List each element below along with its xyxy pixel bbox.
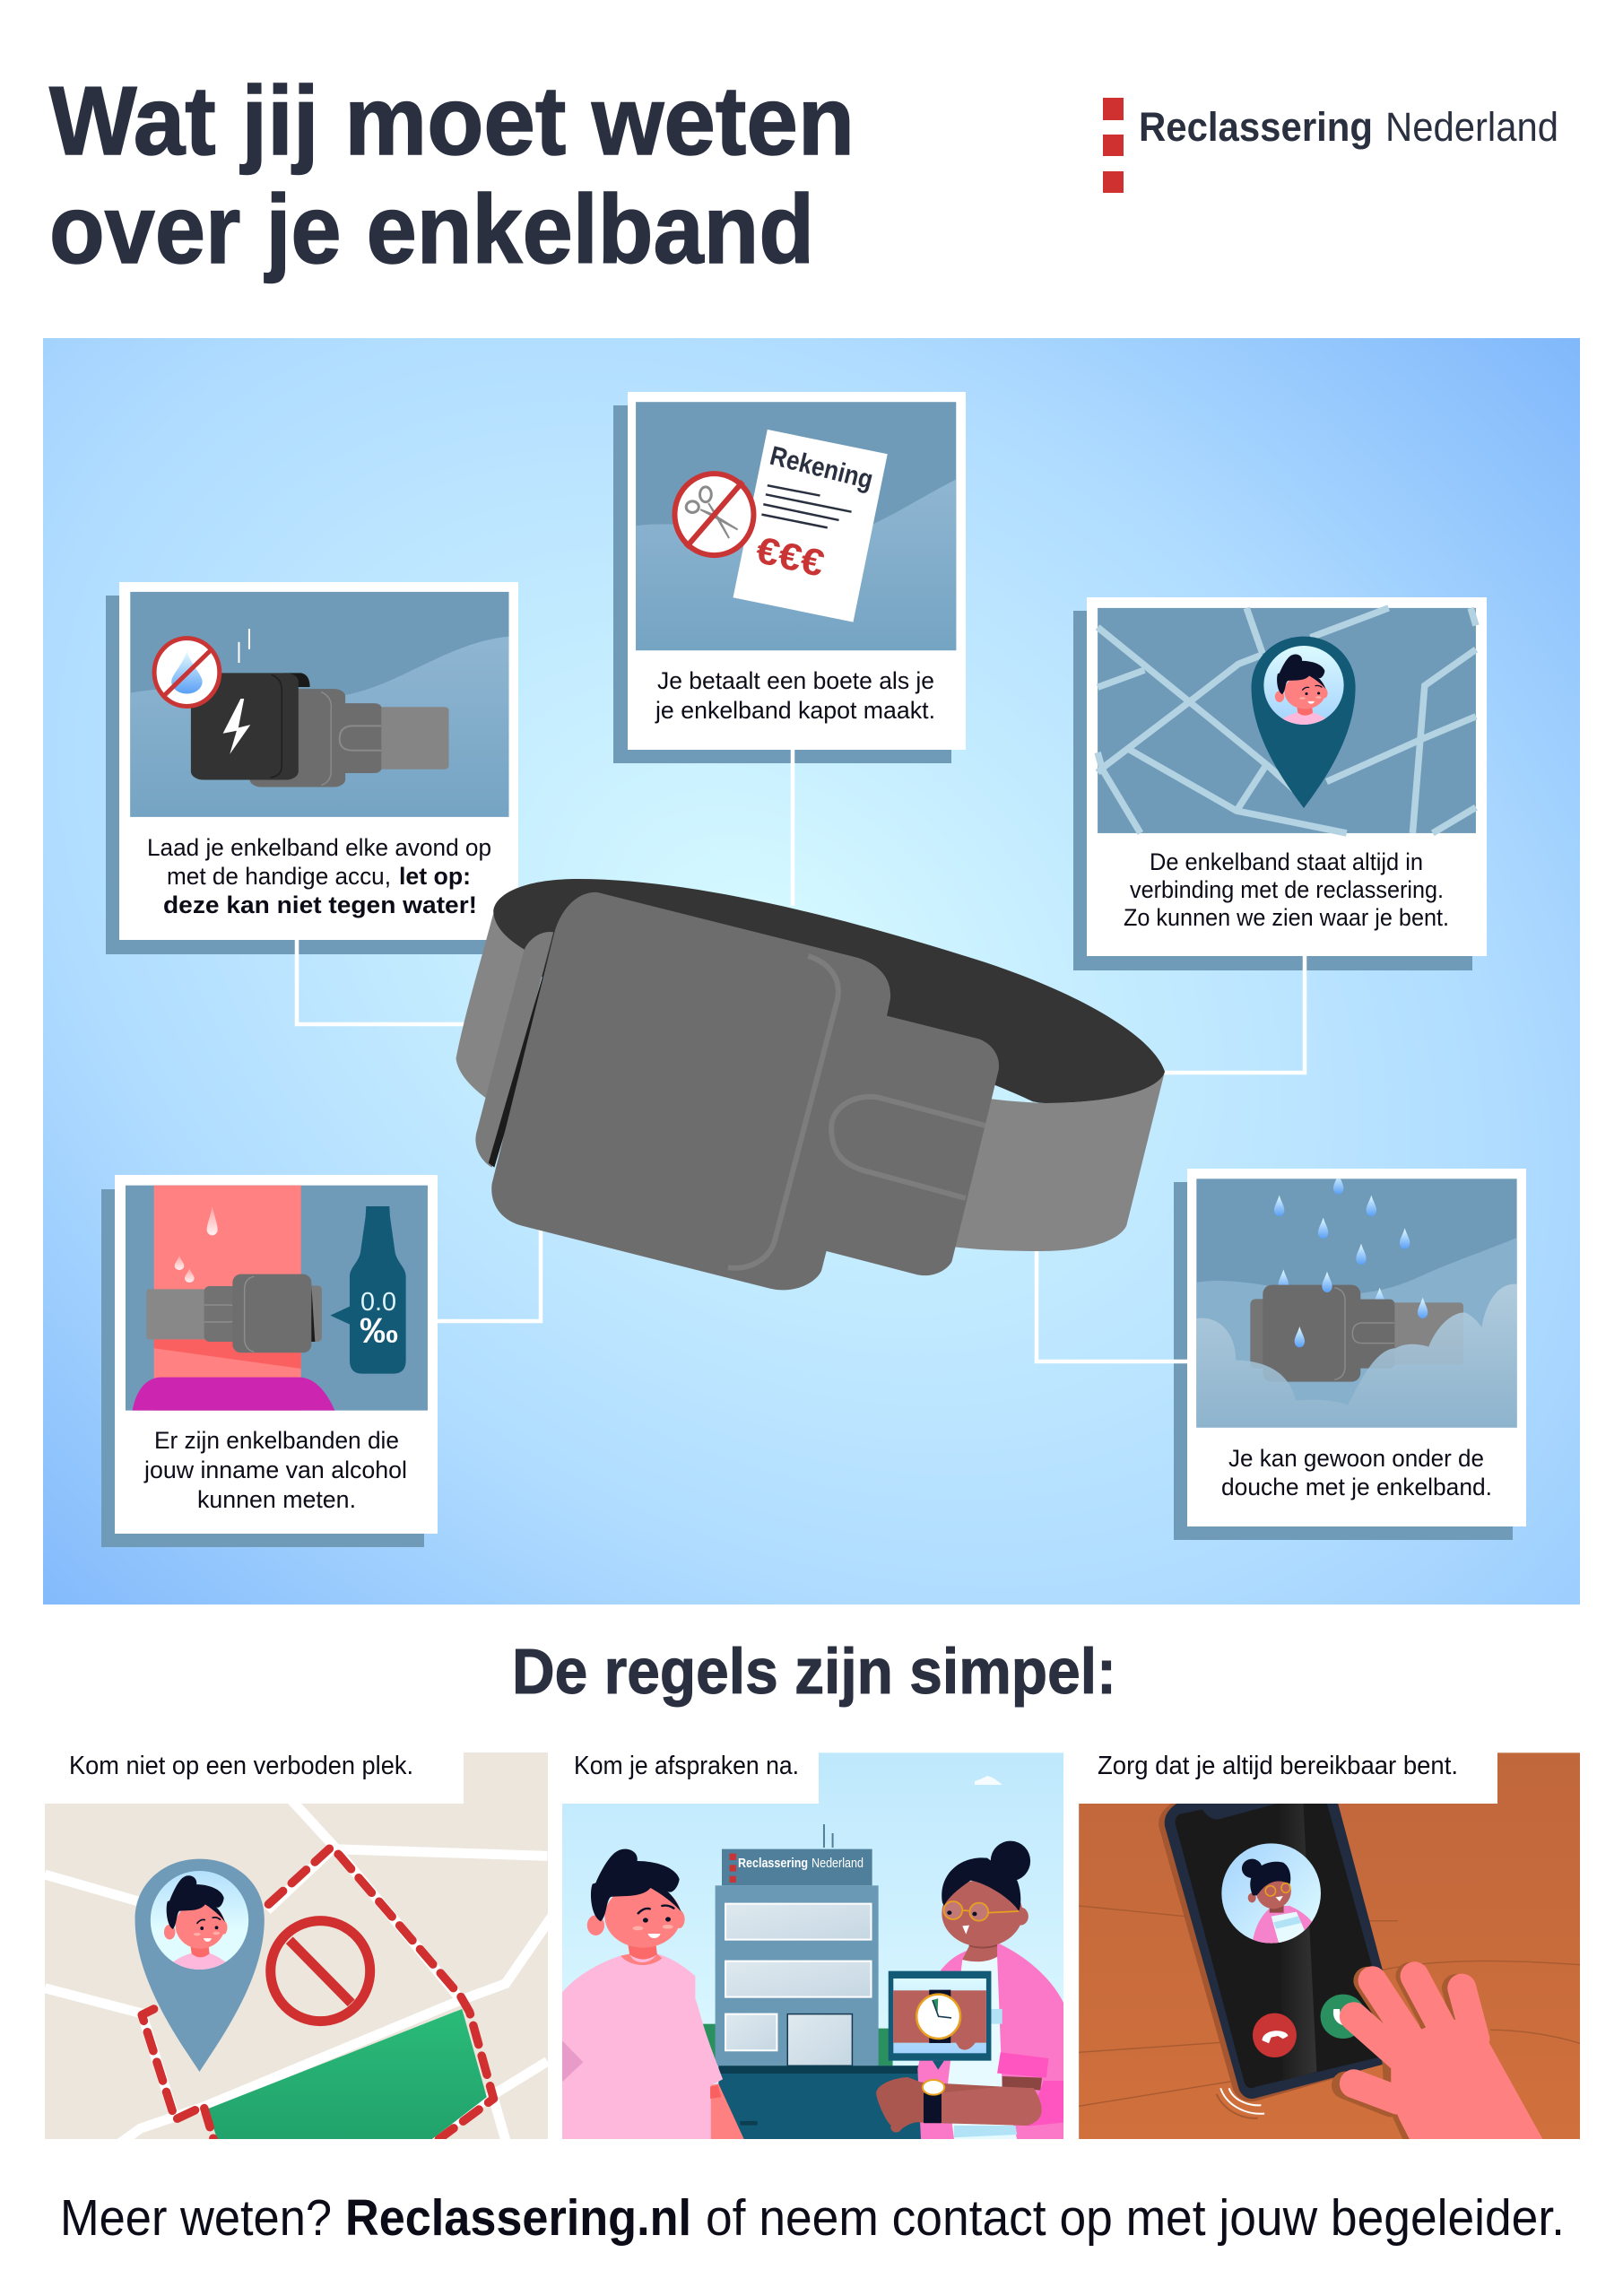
text block: kunnen meten. xyxy=(197,1486,356,1513)
panel: charging xyxy=(119,582,518,940)
white tab with caption xyxy=(556,1749,819,1804)
text block: met de handige accu, xyxy=(167,863,391,890)
hero panel background xyxy=(43,338,1580,1605)
text block: De enkelband staat altijd in xyxy=(1150,848,1423,875)
footer call to action xyxy=(60,2189,1565,2247)
text block xyxy=(655,667,935,724)
illustration: probation office with two people xyxy=(562,1752,1063,2139)
footer call to action: Meer weten? xyxy=(60,2189,332,2247)
text block: Je kan gewoon onder de xyxy=(1228,1445,1484,1472)
text block: verbinding met de reclassering. xyxy=(1130,876,1444,903)
central ankle band xyxy=(456,879,1165,1290)
text block xyxy=(147,834,491,918)
text block xyxy=(1124,848,1449,931)
panel: shower xyxy=(1187,1169,1526,1526)
illustration: invoice and no-scissors sign xyxy=(636,402,956,650)
title: over je enkelband xyxy=(49,175,814,284)
bottle value xyxy=(360,1288,398,1351)
bottle value: 0.0 xyxy=(360,1288,396,1317)
title xyxy=(49,66,855,284)
invoice label: Rekening xyxy=(767,441,876,495)
panel: be reachable xyxy=(1067,1749,1580,2139)
text block: Er zijn enkelbanden die xyxy=(154,1427,399,1454)
text block: jouw inname van alcohol xyxy=(143,1457,407,1483)
illustration: battery charging with no-water sign xyxy=(130,592,509,817)
building sign xyxy=(738,1856,864,1871)
building sign: Reclassering xyxy=(738,1856,808,1871)
logo: Reclassering Nederland xyxy=(1103,98,1558,193)
white tab with caption: Kom je afspraken na. xyxy=(574,1752,799,1780)
text block: deze kan niet tegen water! xyxy=(163,891,477,918)
text block: douche met je enkelband. xyxy=(1221,1474,1492,1500)
logo: Reclassering Nederland: Nederland xyxy=(1385,104,1558,150)
logo: Reclassering Nederland: Reclassering xyxy=(1139,104,1373,150)
panel: alcohol xyxy=(115,1175,438,1534)
illustration: map with location pin xyxy=(1098,608,1476,833)
footer call to action: of neem contact op met jouw begeleider. xyxy=(706,2189,1565,2247)
illustration: hand answering phone call xyxy=(1079,1752,1580,2139)
illustration: leg with ankle band and bottle xyxy=(126,1186,428,1411)
text block xyxy=(1221,1445,1492,1500)
white tab with caption: Zorg dat je altijd bereikbaar bent. xyxy=(1098,1752,1458,1780)
illustration: map with forbidden zone xyxy=(45,1752,552,2144)
white tab with caption xyxy=(36,1749,464,1804)
white tab with caption xyxy=(1067,1749,1497,1804)
text block: let op: xyxy=(399,863,471,890)
card shadows xyxy=(101,405,1513,1547)
heading: rules: De regels zijn simpel: xyxy=(512,1637,1116,1708)
panel: forbidden place xyxy=(36,1749,552,2144)
text block: Je betaalt een boete als je xyxy=(657,667,934,694)
title: Wat jij moet weten xyxy=(49,66,855,176)
panel: appointments xyxy=(556,1749,1063,2139)
panel: location xyxy=(1087,597,1487,956)
white tab with caption: Kom niet op een verboden plek. xyxy=(69,1752,413,1780)
panel: fine xyxy=(628,392,966,750)
illustration: ankle band in shower xyxy=(1196,1173,1517,1428)
building sign: Nederland xyxy=(812,1856,864,1871)
euro signs: €€€ xyxy=(752,528,829,585)
text block: je enkelband kapot maakt. xyxy=(655,697,935,724)
connector lines xyxy=(297,750,1305,1361)
footer call to action: Reclassering.nl xyxy=(345,2189,691,2247)
text block: Zo kunnen we zien waar je bent. xyxy=(1124,904,1449,931)
text block: Laad je enkelband elke avond op xyxy=(147,834,491,861)
bottle value: ‰ xyxy=(360,1311,398,1351)
text block xyxy=(143,1427,407,1513)
